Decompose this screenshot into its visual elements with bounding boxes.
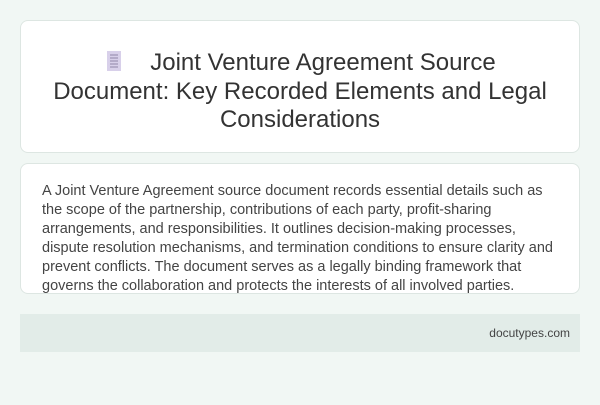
footer: docutypes.com (489, 326, 570, 340)
description text: A Joint Venture Agreement source document records essential details such as the scope of the partnership, contributions of each party, profit-sharing arrangements, and responsibilities. It outlines decision-making processes, dispute resolution mechanisms, and termination conditions to ensure clarity and prevent conflicts. The document serves as a legally binding framework that governs the collaboration and protects the interests of all involved parties. (42, 183, 553, 294)
icon: document (107, 51, 121, 71)
title: Joint Venture Agreement Source Document: Key Recorded Elements and Legal Considerations (53, 49, 547, 133)
footer (20, 314, 580, 352)
description card (20, 163, 580, 294)
title card (20, 20, 580, 153)
